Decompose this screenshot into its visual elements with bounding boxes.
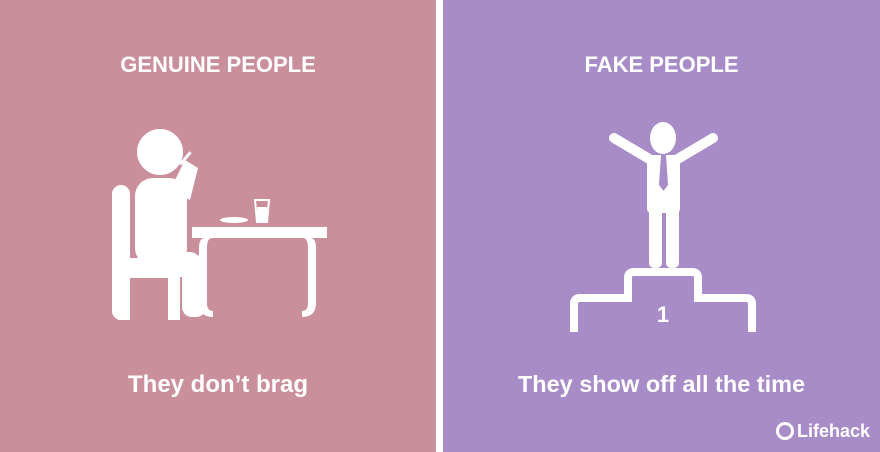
icon: person on podium — [570, 122, 756, 332]
icon: person on podium: 1 — [657, 302, 669, 327]
panel: fake people — [443, 0, 880, 452]
heading: fake people: FAKE PEOPLE — [584, 52, 739, 77]
heading: genuine people: GENUINE PEOPLE — [120, 52, 316, 77]
icon: person eating at table — [112, 129, 327, 320]
caption: they don't brag: They don’t brag — [128, 371, 308, 398]
logo: lifehack: Lifehack — [797, 421, 870, 441]
panel: genuine people — [0, 0, 436, 452]
caption: they show off all the time: They show off all the time — [518, 371, 805, 397]
